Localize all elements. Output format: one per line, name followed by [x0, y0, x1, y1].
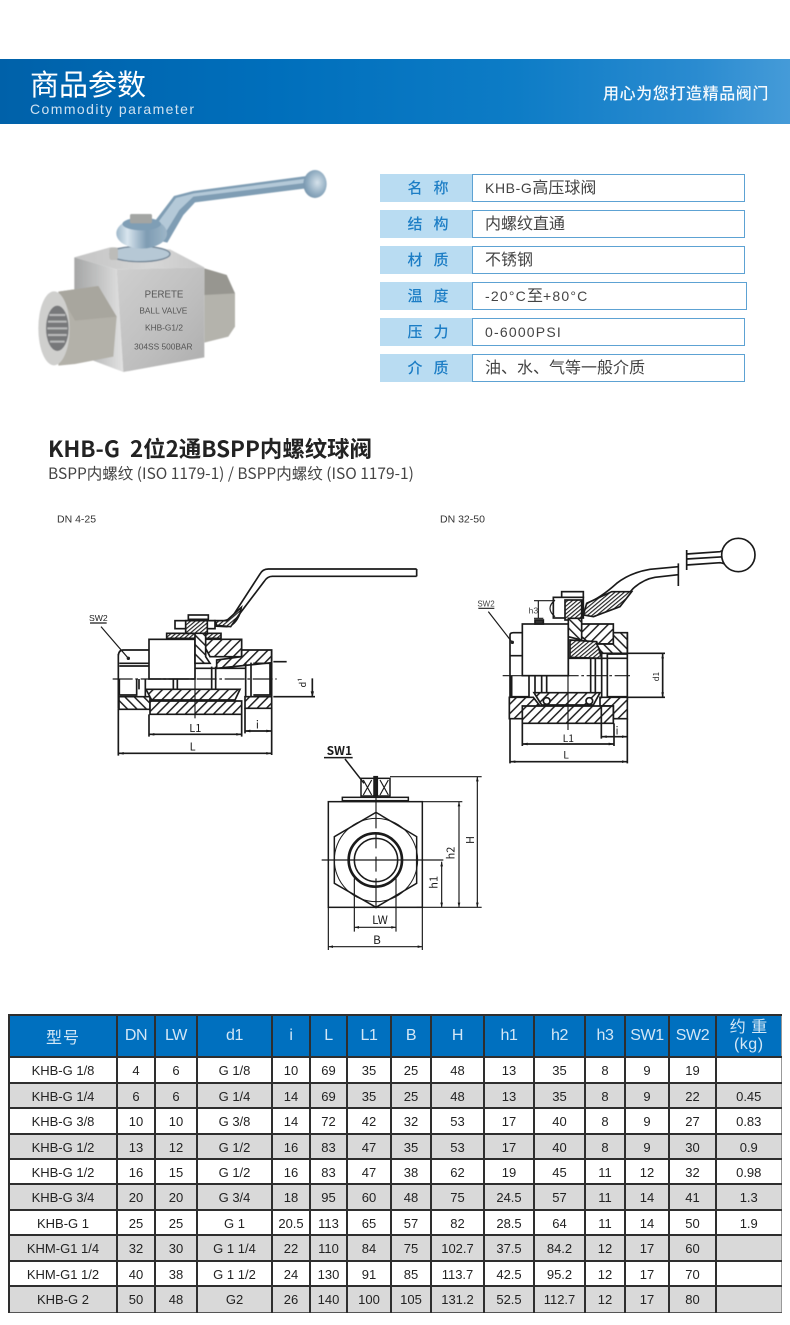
table row 9: 42.5: [496, 1266, 522, 1282]
dimensions: d1: [651, 672, 662, 681]
table row 2: 14: [284, 1088, 298, 1104]
bore circles: [349, 833, 402, 887]
table row 2: KHB-G 1/4: [32, 1088, 94, 1104]
table header: L1: [360, 1027, 378, 1044]
table row 5: 83: [321, 1164, 336, 1180]
spec row: material: 不锈钢: [485, 246, 533, 270]
body square and plate: [328, 802, 422, 907]
table header: LW: [165, 1027, 187, 1044]
table row 3: 42: [362, 1114, 376, 1129]
table header: H: [452, 1027, 463, 1044]
dimensions: L: [190, 739, 196, 755]
table row 9: 12: [598, 1266, 612, 1282]
spec row: temperature: 度: [433, 285, 448, 306]
spec row: pressure: 力: [433, 321, 448, 342]
spec row: name: 称: [433, 177, 448, 198]
table row 3: 10: [129, 1114, 143, 1129]
table row 4: 47: [362, 1140, 376, 1154]
face engraving: [134, 289, 193, 351]
table row 9: 17: [640, 1266, 654, 1282]
table row 7: 1.9: [740, 1216, 758, 1230]
table row 4: G 1/2: [219, 1140, 250, 1154]
table row 6: 20: [169, 1190, 183, 1205]
ball end: [687, 538, 755, 572]
product photo: ball valve: [38, 170, 327, 372]
spec row: name: 名: [407, 177, 422, 198]
table row 8: 110: [318, 1241, 339, 1256]
dimensions: [118, 662, 315, 756]
table row 4: KHB-G 1/2: [32, 1140, 94, 1154]
table row 8: 32: [129, 1241, 143, 1256]
table row 2: 35: [552, 1088, 567, 1104]
spec row: material: 材: [407, 249, 422, 270]
table row 4: 40: [552, 1140, 567, 1154]
table row 5: 12: [640, 1164, 654, 1180]
table row 3: 40: [552, 1114, 567, 1129]
table row 6: 20: [129, 1190, 143, 1205]
SW1 label and leader: [324, 742, 364, 783]
table row 6: G 3/4: [219, 1190, 250, 1205]
table row 4: 0.9: [740, 1140, 758, 1154]
table row 10: 105: [400, 1292, 422, 1307]
table row 3: 8: [601, 1114, 609, 1129]
table row 10: 12: [598, 1292, 612, 1307]
body: [522, 624, 568, 676]
table row 8: 22: [284, 1241, 298, 1256]
table row 9: 70: [685, 1266, 700, 1282]
square stem: [361, 777, 390, 796]
spec row: structure: 构: [433, 213, 448, 234]
dimensions: h1: [425, 876, 441, 889]
table row 7: G 1: [224, 1216, 245, 1230]
face engraving: KHB-G1/2: [145, 323, 183, 333]
table row 2: 25: [404, 1088, 418, 1104]
table row 8: 12: [598, 1241, 612, 1256]
table row 10: 100: [358, 1292, 380, 1307]
table row 6: [10, 1185, 781, 1209]
table header: h1: [500, 1027, 518, 1044]
spec row: medium: [380, 354, 745, 382]
table row 10: KHB-G 2: [37, 1292, 89, 1307]
spec row: medium: 油、水、气等一般介质: [485, 354, 645, 378]
table row 8: 75: [404, 1241, 418, 1256]
centre lines: [113, 677, 277, 681]
spec row: structure: 内螺纹直通: [485, 210, 565, 234]
table row 8: [10, 1236, 781, 1260]
table row 10: 131.2: [441, 1292, 474, 1307]
table row 1: 48: [450, 1063, 465, 1078]
table row 4: 9: [643, 1140, 651, 1154]
table row 4: 12: [169, 1140, 183, 1154]
table row 9: KHM-G1 1/2: [27, 1266, 99, 1282]
table row 4: 13: [129, 1140, 143, 1154]
table header: B: [406, 1027, 416, 1044]
table row 1: [32, 1063, 700, 1078]
table row 6: 95: [321, 1190, 336, 1205]
table row 3: [32, 1114, 761, 1129]
table row 6: 60: [362, 1190, 376, 1205]
table header: SW2: [676, 1027, 709, 1044]
SW1 label and leader: SW1: [327, 742, 352, 759]
table header: 型号: [46, 1024, 80, 1048]
dimensions: [328, 777, 482, 950]
table row 4: 8: [601, 1140, 609, 1154]
table row 3: 27: [685, 1114, 700, 1129]
table row 8: 30: [169, 1241, 183, 1256]
table row 2: [10, 1084, 781, 1107]
table row 6: 1.3: [740, 1190, 758, 1205]
SW2 label and leader: SW2: [477, 600, 495, 609]
table row 8: KHM-G1 1/4: [27, 1241, 99, 1256]
table row 7: 25: [129, 1216, 143, 1230]
table row 7: 50: [685, 1216, 700, 1230]
spec row: temperature: -20°C至+80°C: [485, 282, 588, 306]
table row 1: 10: [284, 1063, 298, 1078]
face engraving: 304SS 500BAR: [134, 341, 193, 351]
dimensions table: [8, 1014, 782, 1313]
table row 10: 52.5: [496, 1292, 522, 1307]
table row 1: 35: [552, 1063, 567, 1078]
table row 2: 9: [643, 1088, 651, 1104]
table header: SW1: [630, 1027, 664, 1044]
table row 5: 15: [169, 1164, 183, 1180]
table header: d1: [226, 1027, 243, 1044]
table row 3: 17: [502, 1114, 516, 1129]
stem stack: [167, 633, 221, 638]
table row 1: 35: [362, 1063, 376, 1078]
left stub: [118, 650, 149, 708]
table row 5: G 1/2: [219, 1164, 250, 1180]
table header: i: [289, 1027, 293, 1044]
table row 7: 28.5: [496, 1216, 522, 1230]
table row 7: 113: [318, 1216, 339, 1230]
lower body: [534, 693, 600, 705]
table row 2: 6: [132, 1088, 140, 1104]
right end: [597, 633, 627, 653]
SW2 label and leader: SW2: [89, 613, 108, 623]
table row 7: 57: [404, 1216, 418, 1230]
table row 10: 26: [284, 1292, 298, 1307]
table row 8: 60: [685, 1241, 700, 1256]
table row 5: 62: [450, 1164, 465, 1180]
table row 1: G 1/8: [219, 1063, 250, 1078]
table row 3: 0.83: [736, 1114, 761, 1129]
table row 10: 50: [129, 1292, 143, 1307]
table row 6: 75: [450, 1190, 465, 1205]
handle: [210, 569, 417, 627]
table row 10: G2: [226, 1292, 243, 1307]
table row 2: 69: [321, 1088, 336, 1104]
spec row: structure: [380, 210, 745, 238]
spec row: material: 质: [433, 249, 448, 270]
right stub: [217, 650, 272, 668]
table row 5: 0.98: [736, 1164, 761, 1180]
table row 1: 4: [132, 1063, 140, 1078]
table header: 约 重: [730, 1019, 768, 1036]
dimensions: L: [563, 747, 569, 762]
DN 4-25 label: DN 4-25: [57, 514, 96, 526]
table header: (kg): [734, 1036, 764, 1053]
table row 4: [10, 1135, 781, 1158]
header title: 商品参数: [30, 62, 146, 104]
table row 8: G 1 1/4: [213, 1241, 256, 1256]
table row 2: G 1/4: [219, 1088, 250, 1104]
section subheading: BSPP内螺纹 (ISO 1179-1) / BSPP内螺纹 (ISO 1179-1): [48, 462, 414, 484]
table row 9: 113.7: [442, 1266, 473, 1282]
table row 8: 102.7: [441, 1241, 474, 1256]
face engraving: PERETE: [145, 289, 184, 300]
table row 8: 17: [640, 1241, 654, 1256]
table row 7: 64: [552, 1216, 567, 1230]
table row 9: 95.2: [547, 1266, 572, 1282]
table row 6: 24.5: [496, 1190, 522, 1205]
table header: DN: [125, 1027, 147, 1044]
table row 1: 13: [502, 1063, 516, 1078]
spec row: medium: 介: [407, 357, 422, 378]
dimensions: d¹: [295, 678, 309, 687]
table row 1: 19: [685, 1063, 700, 1078]
table row 9: [27, 1266, 700, 1282]
table row 10: 17: [640, 1292, 654, 1307]
bent handle: [587, 550, 687, 617]
table row 3: 14: [284, 1114, 298, 1129]
section heading: KHB-G 2位2通BSPP内螺纹球阀: [48, 432, 372, 464]
technical drawing: end view: [322, 742, 482, 950]
table row 3: 9: [643, 1114, 651, 1129]
table row 9: 24: [284, 1266, 298, 1282]
dimensions: i: [616, 722, 619, 737]
table row 5: 45: [552, 1164, 567, 1180]
hexagon: [334, 812, 417, 907]
table row 3: 72: [321, 1114, 336, 1129]
table row 1: 8: [601, 1063, 609, 1078]
table row 9: 130: [318, 1266, 339, 1282]
stem and hub: [562, 592, 583, 597]
table row 7: 20.5: [278, 1216, 304, 1230]
table row 7: 25: [169, 1216, 183, 1230]
left end: [510, 633, 547, 697]
spec row: pressure: 0-6000PSI: [485, 324, 562, 340]
spec row: pressure: 压: [407, 321, 422, 342]
table row 1: 69: [321, 1063, 336, 1078]
spec row: structure: 结: [407, 213, 422, 234]
dimensions: i: [256, 717, 259, 733]
face engraving: BALL VALVE: [139, 305, 188, 315]
table header: h2: [551, 1027, 568, 1044]
table row 4: 35: [404, 1140, 418, 1154]
spec row: temperature: 温: [407, 285, 422, 306]
table row 6: KHB-G 3/4: [32, 1190, 94, 1205]
table row 3: G 3/8: [219, 1114, 250, 1129]
table row 1: 9: [643, 1063, 651, 1078]
table row 6: 41: [685, 1190, 700, 1205]
table row 5: KHB-G 1/2: [32, 1164, 94, 1180]
table row 2: 6: [172, 1088, 180, 1104]
table row 1: 6: [172, 1063, 180, 1078]
left hex stub: [38, 286, 117, 366]
table row 8: 37.5: [496, 1241, 522, 1256]
table row 4: 53: [450, 1140, 465, 1154]
valve body: [74, 247, 204, 372]
table row 5: 19: [502, 1164, 516, 1180]
table row 9: 91: [362, 1266, 376, 1282]
table row 9: 40: [129, 1266, 143, 1282]
spec row: pressure: [380, 318, 745, 346]
table row 5: 16: [284, 1164, 298, 1180]
dimensions: h2: [443, 847, 459, 859]
spec row: name: [380, 174, 745, 202]
table row 9: 38: [169, 1266, 183, 1282]
table row 2: 8: [601, 1088, 609, 1104]
table row 2: 13: [502, 1088, 516, 1104]
table header: [10, 1016, 781, 1312]
table row 6: 18: [284, 1190, 298, 1205]
table row 10: [10, 1287, 781, 1312]
table row 1: KHB-G 1/8: [32, 1063, 94, 1078]
table row 7: [37, 1216, 758, 1230]
table row 6: 11: [598, 1190, 612, 1205]
table row 5: 11: [598, 1164, 612, 1180]
table row 4: 30: [685, 1140, 700, 1154]
table row 4: 17: [502, 1140, 516, 1154]
spec row: name: KHB-G高压球阀: [485, 174, 596, 198]
table header: h3: [596, 1027, 614, 1044]
table row 1: 25: [404, 1063, 418, 1078]
table row 7: 14: [640, 1216, 654, 1230]
technical drawing: DN 32-50 section view: [477, 538, 755, 763]
table row 7: KHB-G 1: [37, 1216, 89, 1230]
stem hub and washer: [109, 214, 170, 262]
table row 10: 48: [169, 1292, 183, 1307]
table row 7: 65: [362, 1216, 376, 1230]
header slogan: 用心为您打造精品阀门: [603, 80, 769, 104]
table row 6: 57: [552, 1190, 567, 1205]
right hex stub: [204, 268, 235, 343]
table row 4: 83: [321, 1140, 336, 1154]
table row 2: 35: [362, 1088, 376, 1104]
dimensions: B: [373, 931, 381, 948]
table row 7: 82: [450, 1216, 465, 1230]
header subtitle: Commodity parameter: [30, 101, 195, 117]
table row 10: 80: [685, 1292, 700, 1307]
table row 3: KHB-G 3/8: [32, 1114, 94, 1129]
table row 7: 11: [598, 1216, 612, 1230]
centre lines: [322, 777, 443, 908]
DN 32-50 label: DN 32-50: [440, 514, 485, 526]
table row 6: 14: [640, 1190, 654, 1205]
table row 9: 85: [404, 1266, 418, 1282]
lever handle: [153, 170, 327, 243]
spec row: medium: 质: [433, 357, 448, 378]
photo shapes: [38, 170, 327, 372]
table row 9: G 1 1/2: [213, 1266, 256, 1282]
dimensions: LW: [372, 911, 388, 928]
table row 3: 53: [450, 1114, 465, 1129]
table row 5: 47: [362, 1164, 376, 1180]
SW2 label and leader: [477, 600, 514, 644]
spec row: material: [380, 246, 745, 274]
spec row: temperature: [380, 282, 747, 310]
centre lines: [503, 674, 630, 677]
table row 2: 48: [450, 1088, 465, 1104]
SW2 label and leader: [89, 613, 130, 660]
table row 2: 0.45: [736, 1088, 761, 1104]
table row 3: 32: [404, 1114, 418, 1129]
table row 2: 22: [685, 1088, 700, 1104]
dimensions: [510, 653, 665, 763]
h3 dimension: h3: [529, 605, 538, 615]
table row 4: 16: [284, 1140, 298, 1154]
table row 10: 112.7: [544, 1292, 575, 1307]
body: [149, 639, 195, 679]
h3 dimension: [529, 601, 555, 618]
table row 5: 32: [685, 1164, 700, 1180]
technical drawing: DN 4-25 section view: [89, 569, 417, 756]
dimensions: L1: [189, 720, 201, 736]
table row 8: 84: [362, 1241, 376, 1256]
table row 5: 38: [404, 1164, 418, 1180]
table row 8: 84.2: [547, 1241, 572, 1256]
dimensions: H: [462, 836, 478, 844]
table row 5: [32, 1164, 761, 1180]
table row 6: 48: [404, 1190, 418, 1205]
table row 3: 10: [169, 1114, 183, 1129]
table row 5: 16: [129, 1164, 143, 1180]
table row 10: 140: [318, 1292, 339, 1307]
header band: [0, 59, 790, 124]
lower body: [146, 689, 240, 700]
table header: L: [324, 1027, 333, 1044]
dimensions: L1: [563, 730, 574, 745]
